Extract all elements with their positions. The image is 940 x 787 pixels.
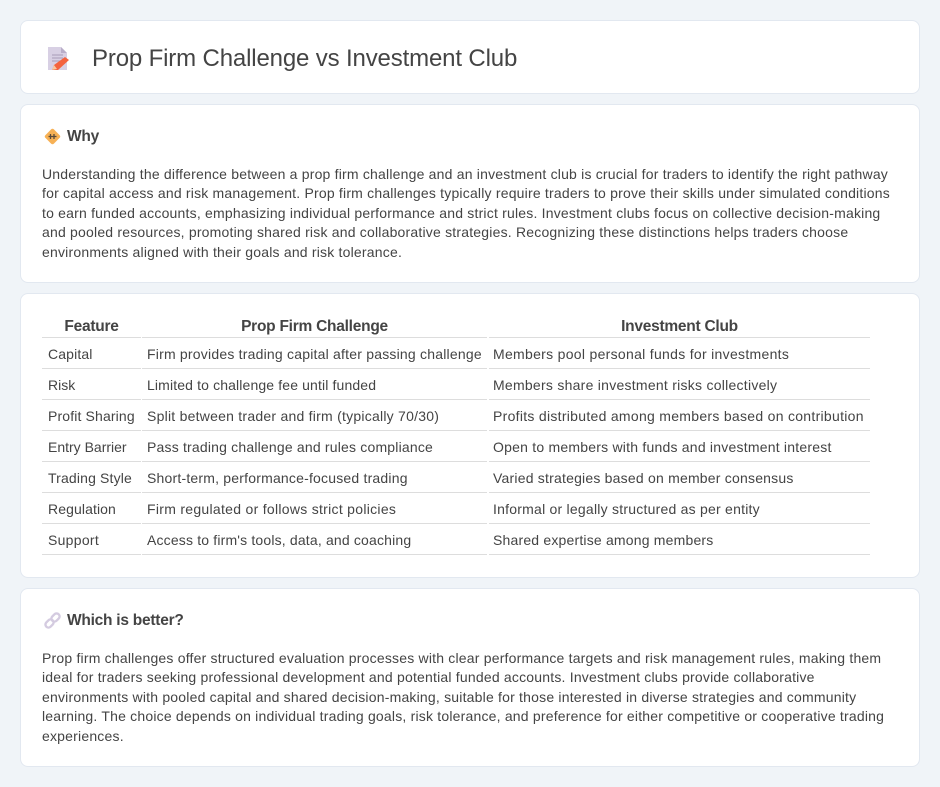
text block: which is better <box>42 650 884 744</box>
row: entry barrier <box>42 439 870 462</box>
row: support: Shared expertise among members <box>493 532 713 548</box>
text block: which is better: environments with pooled capital and shared decision-making, suitable for those interested in diverse strategies and community <box>42 689 856 705</box>
text block: why: and pooled resources, promoting shared risk and collaborative strategies. Recognizing these distinctions helps traders choose <box>42 224 848 240</box>
row: trading style: Varied strategies based on member consensus <box>493 470 794 486</box>
row: profit sharing <box>42 408 870 431</box>
text block: why: for capital access and risk management. Prop firm challenges typically require traders to prove their skills under simulated conditions <box>42 185 890 201</box>
row: profit sharing: Profit Sharing <box>48 408 135 424</box>
row: support <box>42 532 870 555</box>
row: regulation: Regulation <box>48 501 116 517</box>
text block: why: to earn funded accounts, emphasizing individual performance and strict rules. Investment clubs focus on collective decision-making <box>42 205 880 221</box>
row: support: Access to firm's tools, data, and coaching <box>147 532 411 548</box>
text block: why <box>42 166 890 260</box>
row: capital: Members pool personal funds for investments <box>493 346 789 362</box>
icon: chain link <box>44 612 61 629</box>
row: regulation <box>42 501 870 524</box>
row: capital: Capital <box>48 346 93 362</box>
row: support: Support <box>48 532 99 548</box>
table header: Investment Club <box>621 318 738 335</box>
row: risk: Members share investment risks collectively <box>493 377 777 393</box>
text block: which is better: learning. The choice depends on individual trading goals, risk tolerance, and preference for either competitive or cooperative trading <box>42 708 884 724</box>
panel: comparison table <box>20 293 920 578</box>
row: entry barrier: Open to members with funds and investment interest <box>493 439 832 455</box>
text block: which is better: experiences. <box>42 728 124 744</box>
text block: which is better: ideal for traders seeking professional development and potential funded accounts. Investment clubs provide collaborative <box>42 669 815 685</box>
row: entry barrier: Pass trading challenge and rules compliance <box>147 439 433 455</box>
icon: warning diamond <box>44 128 60 144</box>
row: capital <box>42 346 870 369</box>
icon: document with pencil <box>48 47 69 70</box>
row: profit sharing: Split between trader and firm (typically 70/30) <box>147 408 439 424</box>
panel: why <box>20 104 920 283</box>
row: entry barrier: Entry Barrier <box>48 439 127 455</box>
table header: Feature <box>64 318 119 335</box>
row: regulation: Firm regulated or follows strict policies <box>147 501 396 517</box>
row: profit sharing: Profits distributed among members based on contribution <box>493 408 864 424</box>
panel: which is better <box>20 588 920 767</box>
row: risk: Limited to challenge fee until funded <box>147 377 376 393</box>
row: regulation: Informal or legally structured as per entity <box>493 501 760 517</box>
text block: why: Understanding the difference between a prop firm challenge and an investment club is crucial for traders to identify the right pathway <box>42 166 888 182</box>
text block: why: environments aligned with their goals and risk tolerance. <box>42 244 402 260</box>
row: risk <box>42 377 870 400</box>
row: trading style <box>42 470 870 493</box>
table header <box>42 318 870 338</box>
text block: which is better: Prop firm challenges offer structured evaluation processes with clear performance targets and risk management rules, making them <box>42 650 881 666</box>
row: capital: Firm provides trading capital after passing challenge <box>147 346 482 362</box>
heading: which is better: Which is better? <box>67 612 184 629</box>
table header: Prop Firm Challenge <box>241 318 388 335</box>
row: risk: Risk <box>48 377 75 393</box>
panel: title header <box>20 20 920 94</box>
row: trading style: Trading Style <box>48 470 132 486</box>
heading: why: Why <box>67 128 99 145</box>
title: Prop Firm Challenge vs Investment Club <box>92 45 517 72</box>
row: trading style: Short-term, performance-focused trading <box>147 470 408 486</box>
